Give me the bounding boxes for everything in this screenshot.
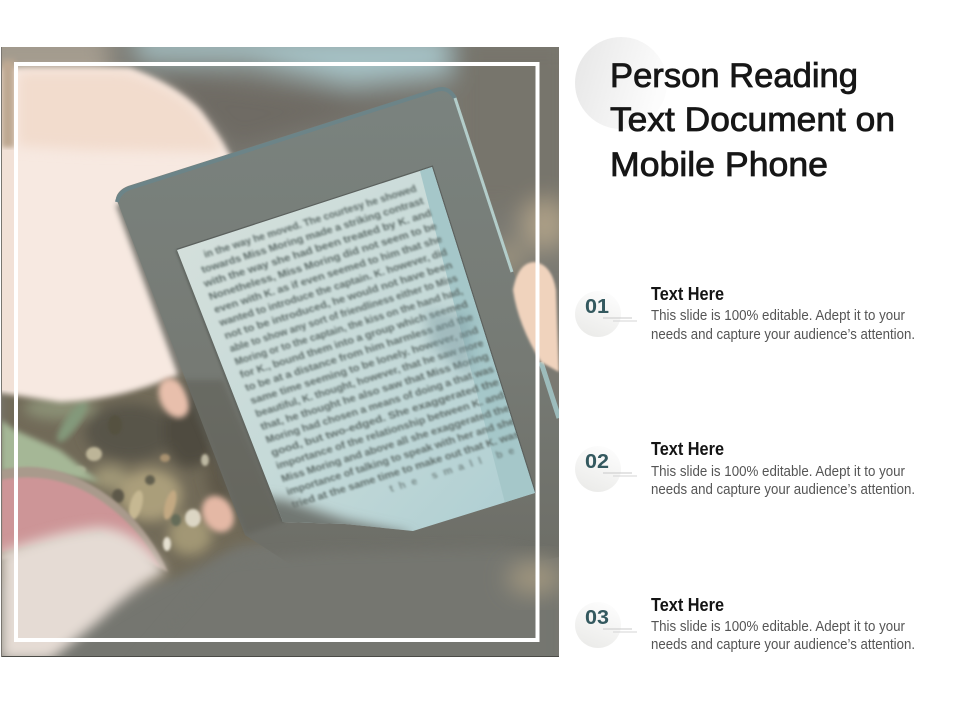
list item 02 (575, 439, 915, 498)
number badge 02 (575, 446, 637, 492)
title: Person Reading (610, 57, 858, 95)
top edge highlight (117, 89, 455, 202)
text block 03: needs and capture your audience’s attention. (651, 637, 915, 653)
text block 03 (651, 595, 915, 653)
e-reader screen with blurred page text: tried at the same time to make out that K. was (290, 429, 522, 511)
e-reader screen with blurred page text: wanted to introduce the captain. K. however, did (216, 246, 449, 329)
right thumb (513, 262, 559, 372)
e-reader screen with blurred page text: importance of the relationship between K. and (274, 390, 506, 472)
e-reader screen with blurred page text (177, 167, 535, 531)
white frame over photo (16, 64, 538, 640)
text block 02: This slide is 100% editable. Adept it to your (651, 464, 905, 480)
e-reader screen with blurred page text: Miss Moring and above all she exaggerated the (280, 403, 511, 485)
text block 01: needs and capture your audience’s attention. (651, 327, 915, 343)
e-reader screen with blurred page text: even with K. as if even seemed to him that she (212, 233, 444, 316)
number badge 03: 03 (585, 607, 609, 629)
list item 01 (575, 284, 915, 343)
e-reader screen with blurred page text: Moring had chosen a means of doing a that was (264, 364, 496, 446)
text block 01: This slide is 100% editable. Adept it to your (651, 308, 905, 324)
text block 02: Text Here (651, 439, 724, 459)
e-reader screen with blurred page text: not to be introduced, he would not have been (223, 259, 454, 342)
e-reader body (116, 87, 559, 590)
e-reader screen with blurred page text: that, he thought he also saw that Miss Moring (259, 351, 491, 433)
e-reader screen with blurred page text: importance of talking to speak with her and she (285, 416, 517, 498)
title: Text Document on (610, 101, 895, 139)
text block 03: This slide is 100% editable. Adept it to your (651, 619, 905, 635)
inner bezel shadow (177, 250, 283, 522)
right edge highlight (455, 98, 512, 272)
e-reader screen with blurred page text: with the way she had been treated by K. and (201, 207, 434, 290)
text block 01 (651, 284, 915, 343)
e-reader screen with blurred page text: Nonetheless, Miss Moring did not seem to be (207, 220, 439, 303)
title (610, 57, 895, 184)
text block 03: Text Here (651, 595, 724, 615)
number badge 03 (575, 602, 637, 648)
number badge 02: 02 (585, 451, 609, 473)
e-reader screen with blurred page text: Moring or to the captain, the kiss on the hand had, (233, 285, 465, 368)
text block 01: Text Here (651, 284, 724, 304)
e-reader screen with blurred page text: beautiful, K. thought, however, that he saw more (254, 338, 486, 420)
sweater blending over lower device edge (287, 556, 506, 590)
warm blur in lower right (507, 562, 563, 594)
title: Mobile Phone (610, 146, 828, 184)
e-reader screen with blurred page text: for K., bound them into a group which seemed (238, 299, 470, 381)
number badge 01: 01 (585, 296, 609, 318)
photo edges (2, 656, 559, 657)
photo: person reading on an e-reader (0, 30, 575, 670)
e-reader screen with blurred page text: same time seeming to be lonely. however, and (249, 325, 480, 407)
e-reader screen with blurred page text: the small be (388, 445, 517, 495)
lower hand (1, 527, 166, 660)
text block 02: needs and capture your audience’s attention. (651, 482, 915, 498)
title circle decoration (575, 37, 667, 129)
background: blue cloth and dark backdrop (0, 30, 575, 274)
e-reader screen with blurred page text: good, but two-edged. She exaggerated the (269, 377, 501, 459)
e-reader screen with blurred page text: in the way he moved. The courtesy he showed (202, 183, 418, 261)
fingertips (152, 373, 240, 538)
ground with leaves (2, 372, 259, 586)
number badge 01 (575, 291, 637, 337)
pink garment with taupe rim (1, 467, 168, 572)
green leaf (1, 420, 100, 482)
text block 02 (651, 439, 915, 498)
list item 03 (575, 595, 915, 653)
upper hand (0, 68, 232, 402)
e-reader screen with blurred page text: towards Miss Moring made a striking contrast (200, 195, 426, 276)
lower-left bezel shade (180, 380, 283, 535)
dark sweater foreground (170, 541, 280, 586)
e-reader screen with blurred page text: able to show any sort of friendliness either to Miss (228, 272, 460, 355)
e-reader screen with blurred page text: to be at a distance from him harmless and the (243, 311, 475, 394)
